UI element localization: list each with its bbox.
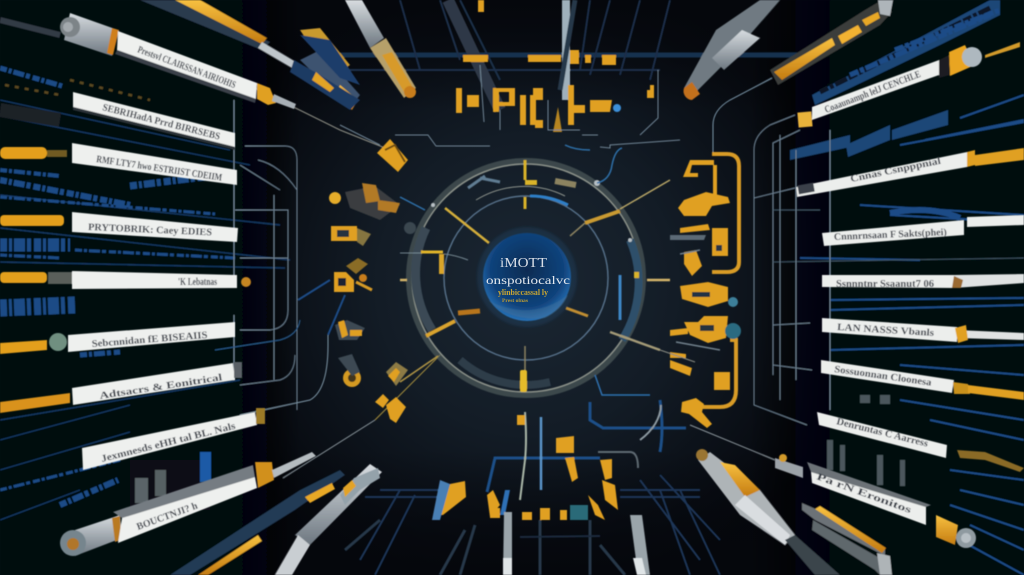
label 1 (115, 31, 296, 109)
label 9 (113, 452, 316, 543)
icon: hub spokes (400, 145, 695, 395)
label 9: BOUCTNJI? h (135, 500, 200, 533)
label 2 (796, 148, 1024, 197)
icon: top circuitry (340, 0, 800, 148)
heading: hub text (486, 256, 570, 304)
heading: hub text: Prest olnas (502, 298, 528, 304)
label 8 (82, 408, 265, 470)
label 5 (72, 271, 251, 289)
icon: top left cylinder (60, 13, 119, 56)
icon: bottom left cylinder (60, 515, 122, 556)
heading: hub text: iMOTT (500, 256, 547, 271)
label 6: Sossuonnan Cloonesa (834, 364, 932, 389)
label 3: RMF LTY7 hwo ESTRIIST CDEIIM (96, 154, 223, 184)
heading: hub text: ylinbiccassal ly (498, 288, 548, 297)
label 8: Pa rN Eronitos (815, 471, 913, 516)
label 6 (821, 360, 1024, 400)
label 6: Sebcnnidan fE BISEAIIS (91, 330, 208, 350)
icon: gold tube top left (140, 0, 360, 110)
label 1: Coaaunamph lelJ CENCHLE (823, 69, 923, 116)
label 1 (797, 42, 1020, 128)
icon: right circuit frame (690, 78, 1024, 460)
icon: left circuit frame (215, 88, 440, 478)
label 5: 'K Lebatnas (178, 277, 217, 288)
label 5: LAN NASSS Vbanls (837, 322, 934, 339)
label 6 (68, 322, 235, 352)
label 4: PRYTOBRIK: Caey EDIES (88, 222, 213, 238)
icon: bottom-centre circuitry (345, 400, 720, 575)
panel: left labels (0, 13, 316, 556)
label 7 (72, 362, 242, 405)
icon: silver tube top centre-left (300, 0, 416, 110)
label 3: Cnnnrnsaan F Sakts(phei) (834, 227, 947, 243)
label 7 (817, 412, 1024, 472)
label 4 (72, 212, 238, 242)
heading: hub text: onspotiocalvc (486, 273, 570, 287)
label 7: Adtsacrs & Eonitrical (99, 372, 223, 402)
panel: left data wall (0, 0, 300, 575)
icon: silver tube top right (683, 0, 893, 100)
label 7: Denruntas C Aarress (835, 416, 929, 450)
label 2 (73, 92, 235, 150)
label 4 (822, 274, 1024, 290)
label 3 (822, 215, 1024, 246)
icon: tube bottom right (696, 449, 892, 575)
label 8: Jexmnesds eHH tal BL. Nals (100, 421, 237, 465)
label 2: SEBRIHadA Prrd BIRRSEBS (101, 102, 222, 143)
label 3 (72, 143, 237, 185)
panel: right labels (775, 42, 1024, 548)
icon: left gadget column (329, 139, 408, 423)
panel: right data wall (750, 0, 1024, 575)
icon: left yellow bars (0, 147, 72, 413)
icon: central globe (477, 227, 577, 327)
label 8 (775, 454, 976, 548)
icon: hub rings (409, 161, 643, 395)
icon: right gadget column with frame (670, 154, 741, 428)
icon: silver tube bottom left (170, 464, 382, 575)
label 2: Cnnas Csnpppnial (849, 156, 942, 185)
label 5 (822, 318, 1024, 343)
label 4: Ssnnntnr Ssaanut7 06 (836, 279, 934, 290)
label 1: Prestsvl CLAIRSSAN AIRIOHIS (136, 45, 238, 91)
